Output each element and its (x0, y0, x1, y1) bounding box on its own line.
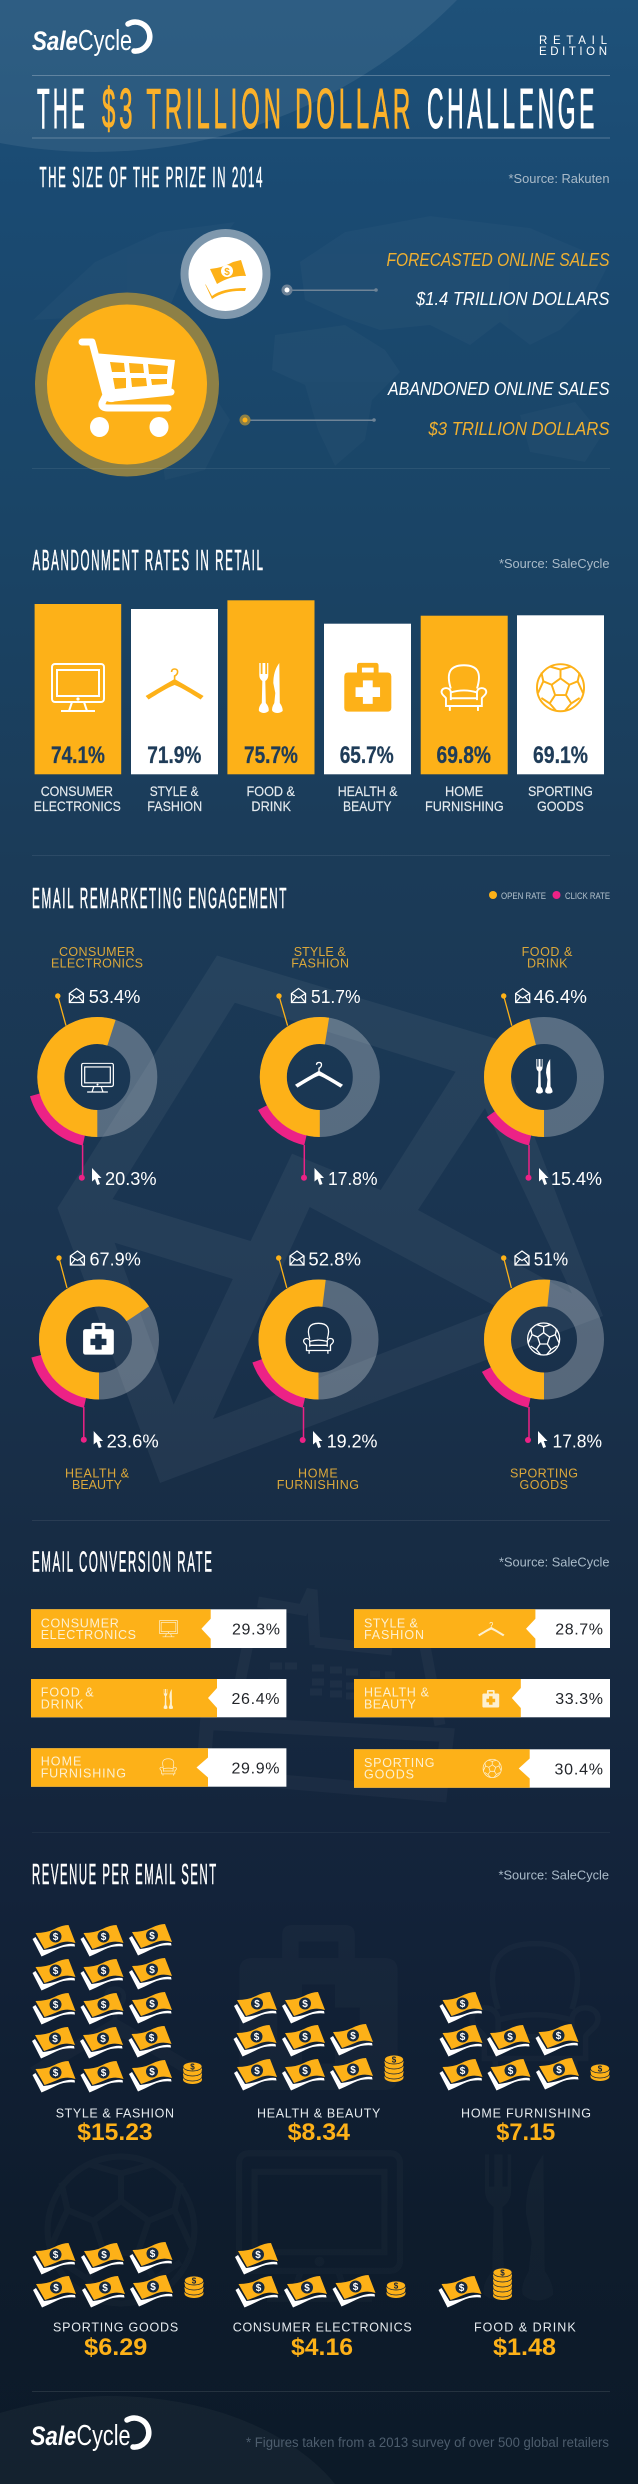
conversion bar: style and fashion (354, 1609, 610, 1648)
revenue: food and drink: $1.48 (493, 2334, 556, 2361)
donut: style and fashion (243, 945, 397, 1189)
conversion bar: health and beauty: HEALTH & (364, 1686, 430, 1700)
bar: consumer electronics (34, 604, 121, 814)
conversion bar: health and beauty: BEAUTY (364, 1697, 416, 1711)
donut: style and fashion: 51.7% (311, 986, 360, 1007)
bar: style and fashion (131, 609, 218, 814)
bar: sporting goods: 69.1% (533, 742, 588, 769)
conversion bar: food and drink (31, 1679, 286, 1717)
conversion bar: food and drink: DRINK (41, 1697, 84, 1711)
bar: food and drink: 75.7% (244, 742, 298, 769)
revenue: food and drink: FOOD & DRINK (474, 2321, 576, 2335)
donut: consumer electronics (21, 945, 174, 1189)
conversion bar: style and fashion: FASHION (364, 1628, 424, 1642)
donut: home furnishing: 52.8% (308, 1249, 361, 1270)
icon: shopping cart circle (35, 292, 219, 476)
donut: health and beauty: 23.6% (107, 1431, 159, 1452)
donut: sporting goods (467, 1249, 621, 1492)
bar: sporting goods: SPORTING (528, 783, 593, 799)
conversion bar: consumer electronics: CONSUMER (41, 1616, 119, 1630)
edition label: EDITION (539, 46, 607, 58)
conversion bar: food and drink: FOOD & (41, 1686, 94, 1700)
text: EMAIL CONVERSION RATE (32, 1547, 214, 1579)
revenue: style and fashion (32, 1924, 202, 2146)
conversion bar: sporting goods: 30.4% (554, 1761, 603, 1778)
bar: health and beauty: BEAUTY (343, 798, 392, 814)
bar: food and drink: DRINK (251, 798, 292, 814)
donut: food and drink: FOOD & (522, 945, 573, 959)
connector: abandoned (240, 414, 376, 426)
donut: health and beauty: HEALTH & (65, 1466, 130, 1480)
revenue: health and beauty (234, 1992, 404, 2146)
donut: home furnishing: FURNISHING (277, 1478, 359, 1492)
footer logo (30, 2418, 149, 2452)
revenue: home furnishing: HOME FURNISHING (461, 2106, 591, 2120)
bar: health and beauty: HEALTH & (338, 783, 398, 799)
stats: online sales: FORECASTED ONLINE SALES (386, 250, 610, 270)
conversion bar: food and drink: 26.4% (232, 1691, 280, 1708)
donut: home furnishing (241, 1249, 396, 1492)
icon: money circle (180, 229, 270, 319)
revenue: sporting goods (32, 2242, 204, 2361)
icon: money circle: $ (224, 267, 230, 278)
header logo: Sale (32, 26, 78, 56)
header logo: Cycle (78, 25, 132, 57)
donut: sporting goods: SPORTING (510, 1466, 578, 1480)
stats: online sales (386, 250, 610, 439)
connector: forecasted (282, 284, 378, 296)
conversion bar: home furnishing: 29.9% (232, 1760, 280, 1777)
bar: home furnishing: 69.8% (436, 742, 491, 769)
stats: online sales: $3 TRILLION DOLLARS (428, 419, 610, 439)
conversion bar: health and beauty: 33.3% (555, 1691, 603, 1708)
conversion bar: home furnishing: FURNISHING (41, 1766, 126, 1780)
revenue: consumer electronics: CONSUMER ELECTRONICS (233, 2321, 412, 2335)
revenue: sporting goods: SPORTING GOODS (53, 2321, 178, 2335)
donut: style and fashion: FASHION (291, 956, 349, 970)
bar: home furnishing: FURNISHING (425, 798, 504, 814)
legend: CLICK RATE (565, 891, 610, 902)
revenue: home furnishing: $7.15 (496, 2119, 555, 2146)
background: price tag outline (57, 956, 603, 1483)
revenue: sporting goods: $6.29 (84, 2334, 147, 2361)
conversion bar: sporting goods: GOODS (364, 1768, 414, 1782)
donut: health and beauty: BEAUTY (72, 1478, 123, 1492)
donut: sporting goods: 51% (534, 1249, 568, 1270)
bar: home furnishing: HOME (445, 783, 483, 799)
footer logo: Cycle (76, 2420, 130, 2452)
footnote: * Figures taken from a 2013 survey of over 500 global retailers (246, 2435, 609, 2450)
revenue: consumer electronics: $4.16 (291, 2334, 353, 2361)
revenue: style and fashion: $15.23 (77, 2119, 153, 2146)
revenue: food and drink (438, 2268, 576, 2361)
footer logo: Sale (30, 2421, 76, 2451)
conversion bar: sporting goods (354, 1749, 610, 1788)
donut: food and drink: 15.4% (551, 1168, 602, 1189)
conversion bar: sporting goods: SPORTING (364, 1756, 434, 1770)
stats: online sales: $1.4 TRILLION DOLLARS (415, 289, 610, 309)
revenue: home furnishing (440, 1992, 610, 2146)
source: Rakuten: *Source: Rakuten (508, 171, 610, 186)
text: ABANDONMENT RATES IN RETAIL (32, 545, 264, 577)
donut: home furnishing: HOME (298, 1466, 338, 1480)
source: SaleCycle conversion: *Source: SaleCycle (499, 1555, 610, 1570)
edition label: RETAIL (539, 35, 608, 47)
panel: abandonment bars (34, 600, 604, 814)
conversion bar: style and fashion: STYLE & (364, 1616, 418, 1630)
conversion bar: consumer electronics (31, 1609, 286, 1648)
edition label (539, 35, 608, 58)
revenue: consumer electronics (233, 2243, 412, 2361)
title: THE (37, 77, 88, 141)
revenue: health and beauty: HEALTH & BEAUTY (257, 2106, 381, 2120)
bar: consumer electronics: CONSUMER (41, 783, 113, 799)
conversion bar: home furnishing: HOME (41, 1755, 81, 1769)
donut: consumer electronics: CONSUMER (59, 945, 135, 959)
revenue: style and fashion: STYLE & FASHION (56, 2106, 174, 2120)
stats: online sales: ABANDONED ONLINE SALES (387, 379, 610, 399)
source: SaleCycle: *Source: SaleCycle (499, 556, 610, 571)
bar: home furnishing (421, 616, 508, 814)
donut: food and drink (467, 945, 621, 1189)
bar: consumer electronics: ELECTRONICS (34, 798, 121, 814)
source: SaleCycle revenue: *Source: SaleCycle (498, 1867, 609, 1882)
bar: sporting goods (517, 615, 604, 814)
background: cash register (203, 1590, 447, 1795)
background: faint category icons (30, 1925, 598, 2303)
legend: OPEN RATE (501, 891, 546, 902)
conversion bar: consumer electronics: ELECTRONICS (41, 1628, 136, 1642)
conversion bar: home furnishing (31, 1748, 286, 1787)
bar: food and drink (227, 600, 314, 814)
donut: health and beauty (22, 1249, 176, 1492)
bar: style and fashion: 71.9% (147, 742, 201, 769)
conversion bar: style and fashion: 28.7% (555, 1621, 603, 1638)
bar: health and beauty: 65.7% (340, 742, 394, 769)
bar: style and fashion: FASHION (147, 798, 202, 814)
donut: consumer electronics: 53.4% (89, 986, 140, 1007)
donut: sporting goods: 17.8% (552, 1431, 602, 1452)
donut: home furnishing: 19.2% (327, 1431, 378, 1452)
donut: consumer electronics: ELECTRONICS (51, 956, 143, 970)
header logo (32, 22, 150, 57)
revenue: health and beauty: $8.34 (288, 2119, 351, 2146)
donut: consumer electronics: 20.3% (105, 1168, 157, 1189)
background: world map (33, 216, 610, 480)
conversion bar: health and beauty (354, 1679, 610, 1717)
bar: food and drink: FOOD & (246, 783, 296, 799)
text: REVENUE PER EMAIL SENT (32, 1859, 218, 1891)
bar: consumer electronics: 74.1% (51, 742, 105, 769)
bar: sporting goods: GOODS (537, 798, 584, 814)
donut: food and drink: DRINK (527, 956, 568, 970)
donut: food and drink: 46.4% (534, 986, 587, 1007)
donut: sporting goods: GOODS (520, 1478, 568, 1492)
text: THE SIZE OF THE PRIZE IN 2014 (40, 162, 264, 194)
donut: style and fashion: 17.8% (328, 1168, 378, 1189)
donut: health and beauty: 67.9% (90, 1249, 141, 1270)
bar: style and fashion: STYLE & (150, 783, 199, 799)
bar: health and beauty (324, 624, 411, 814)
donut: style and fashion: STYLE & (294, 945, 346, 959)
legend (489, 891, 610, 902)
conversion bar: consumer electronics: 29.3% (232, 1621, 280, 1638)
